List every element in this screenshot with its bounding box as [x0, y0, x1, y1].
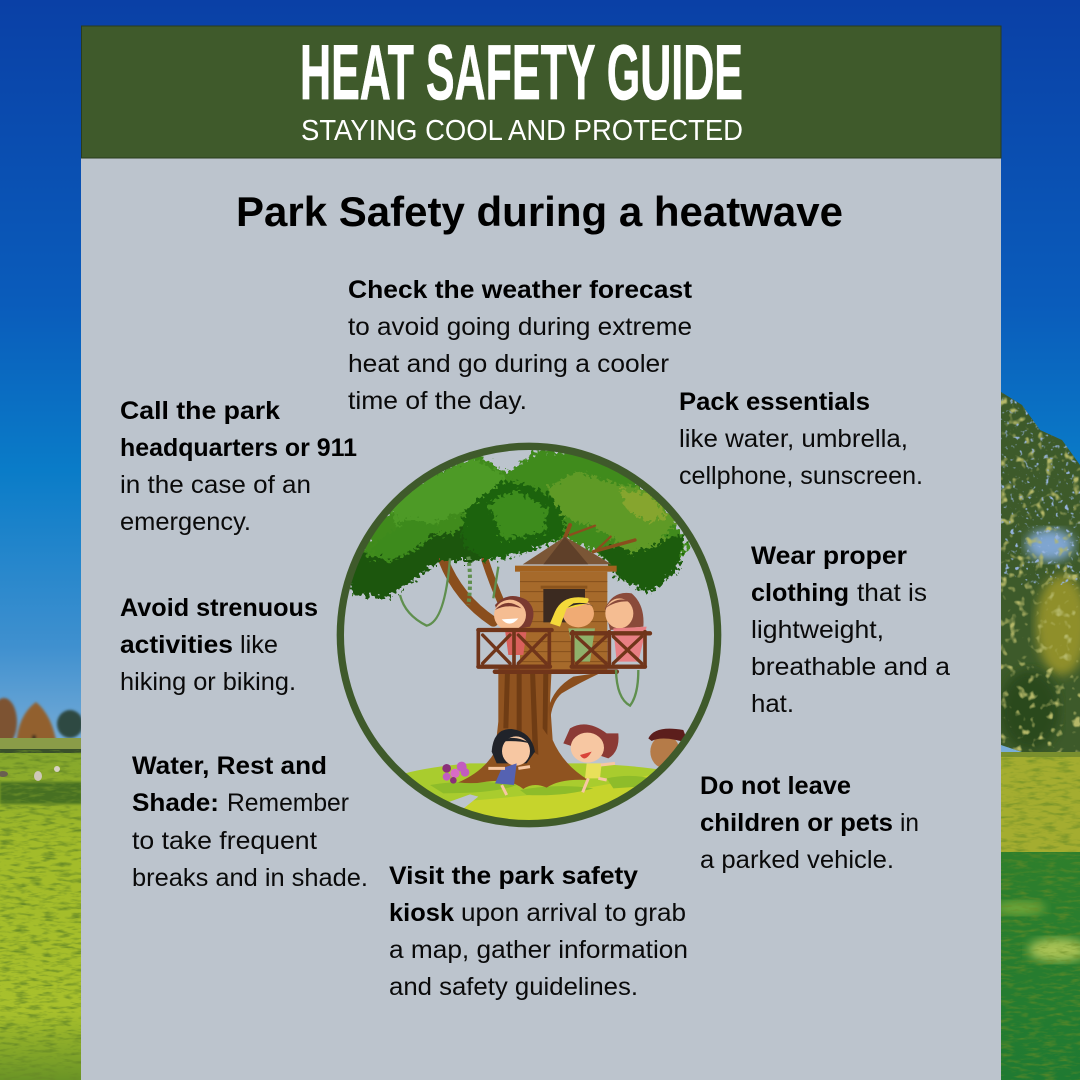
- tip: check the weather forecast: Check the weather forecast: [348, 276, 693, 304]
- subtitle: STAYING COOL AND PROTECTED: [301, 115, 743, 147]
- tip: call the park headquarters: [120, 397, 357, 536]
- trunk: [458, 668, 602, 789]
- ground: [406, 763, 656, 820]
- tip: water, rest and shade: Remember: [227, 789, 349, 817]
- tip: wear proper clothing: clothing: [751, 579, 849, 607]
- tip: avoid strenuous activities: like: [240, 631, 278, 659]
- tip: call the park headquarters: headquarters or 911: [120, 434, 357, 462]
- tip: wear proper clothing: lightweight,: [751, 616, 884, 644]
- tree canopy: [348, 450, 688, 598]
- tip: check the weather forecast: time of the day.: [348, 387, 527, 415]
- tip: do not leave children or pets: in: [900, 809, 919, 837]
- content panel: [81, 158, 1001, 1080]
- tip: do not leave children or pets: [700, 772, 919, 874]
- title: HEAT SAFETY GUIDE: [300, 28, 743, 116]
- vines: [400, 557, 638, 706]
- tip: wear proper clothing: Wear proper: [751, 542, 907, 570]
- tip: visit the park safety kiosk: kiosk: [389, 899, 454, 927]
- tip: call the park headquarters: Call the park: [120, 397, 280, 425]
- tip: avoid strenuous activities: activities: [120, 631, 233, 659]
- tip: wear proper clothing: hat.: [751, 690, 794, 718]
- circular frame: [340, 446, 718, 824]
- tip: do not leave children or pets: a parked vehicle.: [700, 846, 894, 874]
- tip: do not leave children or pets: Do not leave: [700, 772, 851, 800]
- tip: visit the park safety kiosk: upon arrival to grab: [461, 899, 686, 927]
- right meadow: [994, 752, 1080, 1080]
- section heading: Park Safety during a heatwave: [236, 188, 843, 235]
- child 1: [494, 596, 533, 655]
- tip: do not leave children or pets: children or pets: [700, 809, 893, 837]
- tip: wear proper clothing: breathable and a: [751, 653, 950, 681]
- tip: water, rest and shade: breaks and in shade.: [132, 864, 368, 892]
- tip: pack essentials: cellphone, sunscreen.: [679, 462, 923, 490]
- branches: [443, 560, 502, 622]
- railings: [478, 630, 650, 672]
- tip: water, rest and shade: to take frequent: [132, 827, 317, 855]
- tip: call the park headquarters: in the case of an: [120, 471, 311, 499]
- tip: avoid strenuous activities: hiking or biking.: [120, 668, 296, 696]
- tip: visit the park safety kiosk: a map, gather information: [389, 936, 688, 964]
- child 2: [550, 597, 595, 662]
- child running left: [488, 729, 535, 795]
- right tree: [1000, 385, 1080, 760]
- children on the deck: [494, 593, 647, 662]
- child 3: [605, 593, 647, 662]
- flowers: [442, 762, 469, 784]
- tip: call the park headquarters: emergency.: [120, 508, 251, 536]
- tip: water, rest and shade: Water, Rest and: [132, 752, 327, 780]
- tip: check the weather forecast: heat and go during a cooler: [348, 350, 669, 378]
- left meadow: [0, 738, 82, 1080]
- tip: avoid strenuous activities: Avoid strenuous: [120, 594, 318, 622]
- tip: pack essentials: like water, umbrella,: [679, 425, 908, 453]
- tip: visit the park safety kiosk: Visit the park safety: [389, 862, 638, 890]
- tip: check the weather forecast: [348, 276, 693, 415]
- illustration: tree house in circle: [340, 446, 718, 825]
- tip: visit the park safety kiosk: and safety guidelines.: [389, 973, 638, 1001]
- tree house: [515, 537, 617, 670]
- tip: water, rest and shade: [132, 752, 368, 892]
- tip: check the weather forecast: to avoid going during extreme: [348, 313, 692, 341]
- tip: wear proper clothing: [751, 542, 950, 718]
- tip: water, rest and shade: Shade:: [132, 789, 219, 817]
- tip: wear proper clothing: that is: [857, 579, 927, 607]
- tip: avoid strenuous activities: [120, 594, 318, 696]
- tip: pack essentials: [679, 388, 923, 490]
- tip: pack essentials: Pack essentials: [679, 388, 870, 416]
- child running right: [563, 724, 619, 792]
- left distant trees: [0, 698, 83, 751]
- upper branches: [563, 525, 635, 552]
- tip: visit the park safety kiosk: [389, 862, 688, 1001]
- child at edge: [648, 728, 685, 767]
- header band: [82, 26, 1001, 158]
